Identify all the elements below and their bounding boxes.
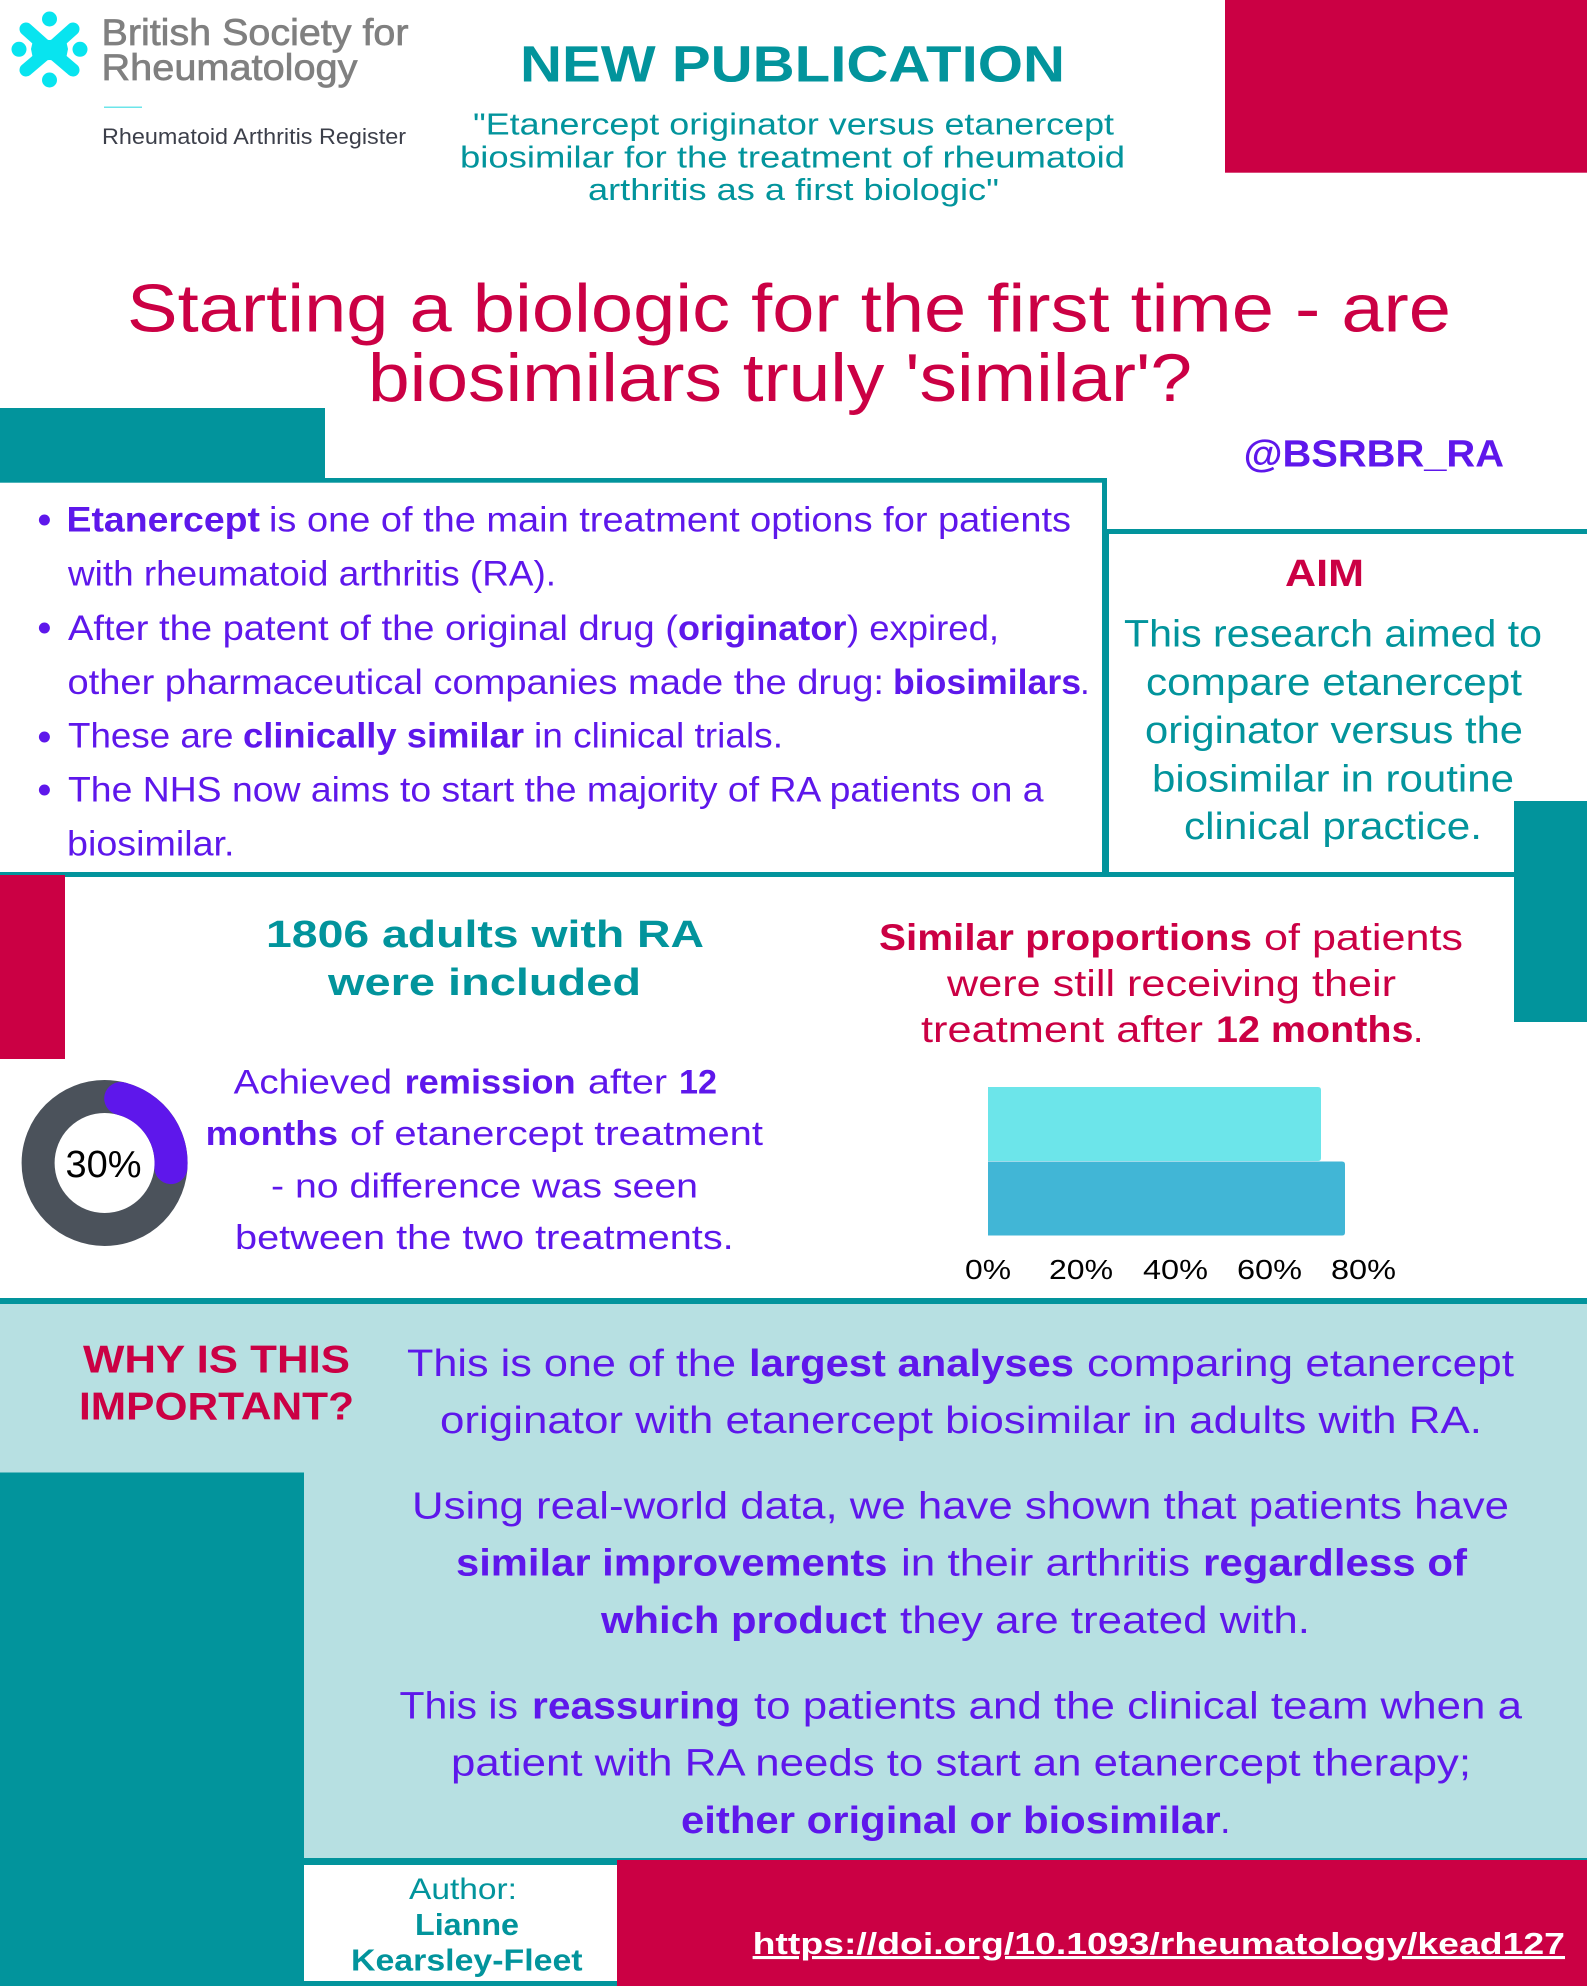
paragraph: reassuring: to patients and the clinical team when a	[754, 1686, 1523, 1728]
bullet list	[39, 501, 1090, 864]
logo: British Society for Rheumatology	[12, 12, 408, 149]
axis labels: 80%	[1331, 1254, 1396, 1285]
paragraph: largest analyses: comparing etanercept	[1087, 1343, 1514, 1385]
paragraph: similar improvements: they are treated with.	[900, 1600, 1310, 1642]
bullet 2: other pharmaceutical companies made the drug:	[68, 663, 884, 702]
text block: similar proportions	[879, 917, 1463, 1050]
axis labels	[965, 1254, 1396, 1285]
paragraph: reassuring	[400, 1686, 1523, 1842]
text block: publication title: biosimilar for the treatment of rheumatoid	[460, 140, 1125, 175]
icon: cyan figure with dots	[12, 12, 88, 88]
bullet 2: biosimilars	[893, 663, 1081, 702]
paragraph: similar improvements: which product	[600, 1600, 887, 1642]
why heading	[79, 1338, 354, 1429]
bullet 1: with rheumatoid arthritis (RA).	[67, 555, 556, 594]
paragraph: reassuring: either original or biosimilar	[681, 1800, 1221, 1842]
bar: biosimilar	[988, 1162, 1345, 1236]
paragraph: similar improvements: Using real-world data, we have shown that patients have	[412, 1486, 1509, 1528]
footer: DOI link bar	[617, 1860, 1587, 1986]
text block: similar proportions: .	[1413, 1009, 1423, 1050]
author name: Kearsley-Fleet	[351, 1943, 583, 1978]
aim text	[1124, 614, 1542, 848]
text block: similar proportions: of patients	[1264, 917, 1463, 958]
text block: publication title	[460, 106, 1125, 207]
panel border: introduction	[0, 478, 1514, 877]
heading: study population: were included	[327, 962, 641, 1004]
aim text: compare etanercept	[1146, 662, 1522, 704]
decorative block: left red	[0, 875, 65, 1059]
paragraph: reassuring: reassuring	[532, 1686, 740, 1728]
why heading: WHY IS THIS	[83, 1338, 350, 1382]
donut value: 30%	[66, 1144, 142, 1186]
logo wordmark: British Society for	[102, 12, 408, 53]
main title: biosimilars truly 'similar'?	[368, 340, 1192, 416]
bullet 2: originator	[678, 609, 847, 648]
decorative block: left teal	[0, 1472, 304, 1986]
decorative block: right teal	[1514, 801, 1587, 1022]
axis labels: 40%	[1143, 1254, 1208, 1285]
text block: publication title: arthritis as a first biologic"	[588, 172, 999, 207]
text block: remission: between the two treatments.	[235, 1219, 734, 1257]
panel: aim	[1103, 529, 1587, 877]
axis labels: 0%	[965, 1254, 1011, 1285]
axis labels: 20%	[1049, 1254, 1113, 1285]
paragraph: similar improvements	[412, 1486, 1509, 1642]
bar: originator	[988, 1087, 1321, 1161]
bullet 2: After the patent of the original drug (	[68, 609, 678, 648]
bullet 3: These are	[68, 717, 234, 756]
bullet 4	[39, 771, 1044, 864]
bullet 2: .	[1080, 663, 1090, 702]
bar chart: treatment retention	[965, 1087, 1396, 1285]
aim text: clinical practice.	[1184, 806, 1482, 848]
text block: remission: - no difference was seen	[271, 1168, 698, 1206]
bullet 3	[39, 717, 783, 756]
author name: Lianne	[415, 1907, 519, 1942]
paragraph: similar improvements: similar improvements	[456, 1543, 888, 1585]
bullet 1: is one of the main treatment options for patients	[269, 501, 1071, 540]
bullet 1	[39, 501, 1071, 594]
text block: similar proportions: were still receiving their	[946, 963, 1396, 1004]
bullet 1: Etanercept	[66, 501, 260, 540]
text block: publication title: "Etanercept originator versus etanercept	[473, 106, 1114, 141]
bullet 3: clinically similar	[243, 717, 524, 756]
aim text: originator versus the	[1145, 710, 1523, 752]
author box	[304, 1865, 617, 1986]
paragraph: largest analyses	[407, 1343, 1514, 1442]
paragraph: reassuring: patient with RA needs to start an etanercept therapy;	[451, 1743, 1471, 1785]
why heading: IMPORTANT?	[79, 1386, 354, 1429]
text block: remission	[206, 1064, 764, 1257]
bullet 4: The NHS now aims to start the majority of RA patients on a	[68, 771, 1044, 810]
paragraph: largest analyses: This is one of the	[407, 1343, 736, 1385]
text block: remission: months	[206, 1115, 338, 1153]
donut chart: 30% remission	[38, 1096, 171, 1230]
decorative block: teal tab	[0, 408, 325, 482]
text block: similar proportions: 12 months	[1216, 1009, 1414, 1050]
twitter handle: @BSRBR_RA	[1244, 434, 1504, 476]
heading: study population	[266, 914, 704, 1004]
paragraph: reassuring: .	[1220, 1800, 1231, 1842]
DOI link: https://doi.org/10.1093/rheumatology/kead127	[753, 1926, 1565, 1961]
paragraph: largest analyses: largest analyses	[749, 1343, 1074, 1385]
text block: remission: Achieved	[234, 1064, 392, 1102]
heading: study population: 1806 adults with RA	[266, 914, 704, 956]
main title: Starting a biologic for the first time - are	[127, 271, 1451, 347]
author label: Author:	[409, 1873, 517, 1906]
logo wordmark: Rheumatology	[102, 47, 358, 88]
text block: remission: 12	[679, 1064, 717, 1102]
text block: similar proportions: Similar proportions	[879, 917, 1252, 958]
paragraph: largest analyses: originator with etanercept biosimilar in adults with RA.	[440, 1400, 1482, 1442]
aim heading: AIM	[1285, 553, 1364, 595]
decorative block: top right red	[1225, 0, 1587, 173]
logo wordmark	[102, 12, 408, 88]
text block: remission: remission	[405, 1064, 576, 1102]
panel: background	[0, 478, 1514, 877]
logo subtitle: Rheumatoid Arthritis Register	[102, 124, 406, 149]
bullet 2: ) expired,	[847, 609, 999, 648]
bullet 2	[39, 609, 1090, 702]
bullet 4: biosimilar.	[67, 825, 234, 864]
bullet 3: in clinical trials.	[534, 717, 783, 756]
text block: remission: after	[588, 1064, 667, 1102]
text block: similar proportions: treatment after	[921, 1009, 1203, 1050]
panel: why is this important	[0, 1298, 1587, 1986]
text block: remission: of etanercept treatment	[350, 1115, 764, 1153]
author name	[351, 1907, 583, 1978]
paragraph: reassuring: This is	[400, 1686, 518, 1728]
paragraph: similar improvements: regardless of	[1203, 1543, 1467, 1585]
aim text: This research aimed to	[1124, 614, 1542, 656]
aim text: biosimilar in routine	[1152, 759, 1514, 801]
paragraph: similar improvements: in their arthritis	[901, 1543, 1190, 1585]
axis labels: 60%	[1237, 1254, 1302, 1285]
heading: new publication: NEW PUBLICATION	[520, 36, 1065, 93]
main title	[127, 271, 1451, 416]
